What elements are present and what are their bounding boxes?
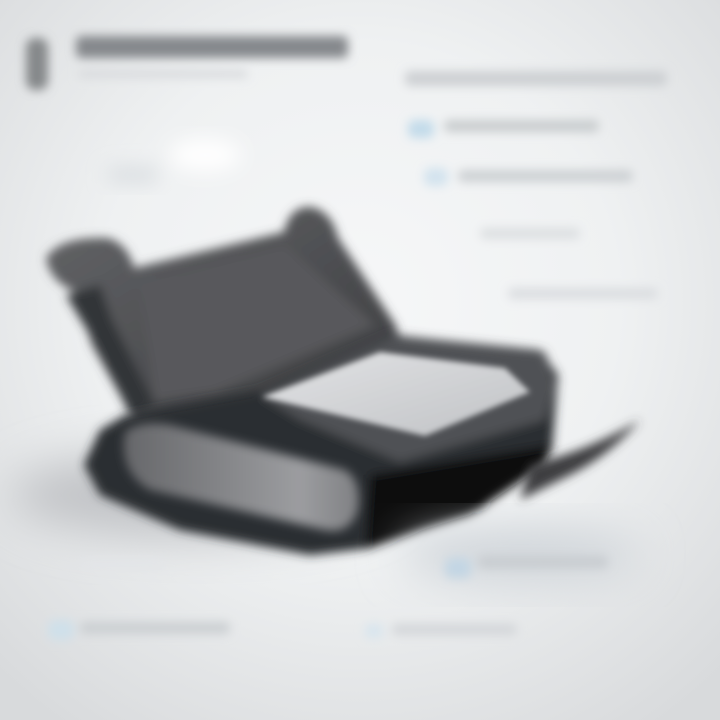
- list item 2: [424, 168, 633, 186]
- front roller: [124, 424, 359, 531]
- paper tail: [520, 420, 640, 500]
- paper tray: [262, 352, 530, 436]
- list heading: [405, 71, 667, 86]
- heading block: [26, 36, 348, 90]
- heading subtitle: [78, 70, 248, 78]
- caption 3: [445, 556, 608, 578]
- list item 4: [508, 288, 658, 299]
- heading bar: [76, 36, 348, 58]
- right text list: [405, 71, 667, 299]
- device: [10, 207, 640, 555]
- bottom captions: [48, 556, 608, 640]
- soft glow top left: [108, 139, 241, 182]
- back panel: [46, 207, 400, 430]
- caption 2: [48, 620, 230, 640]
- caption 4: [365, 624, 517, 638]
- body dark base: [84, 335, 558, 555]
- ground shadow: [10, 450, 390, 540]
- bottom shadow right: [400, 529, 640, 581]
- list item 3: [480, 228, 580, 239]
- caption 1: [80, 560, 165, 569]
- list item 1: [408, 120, 599, 138]
- heading icon: [26, 38, 48, 90]
